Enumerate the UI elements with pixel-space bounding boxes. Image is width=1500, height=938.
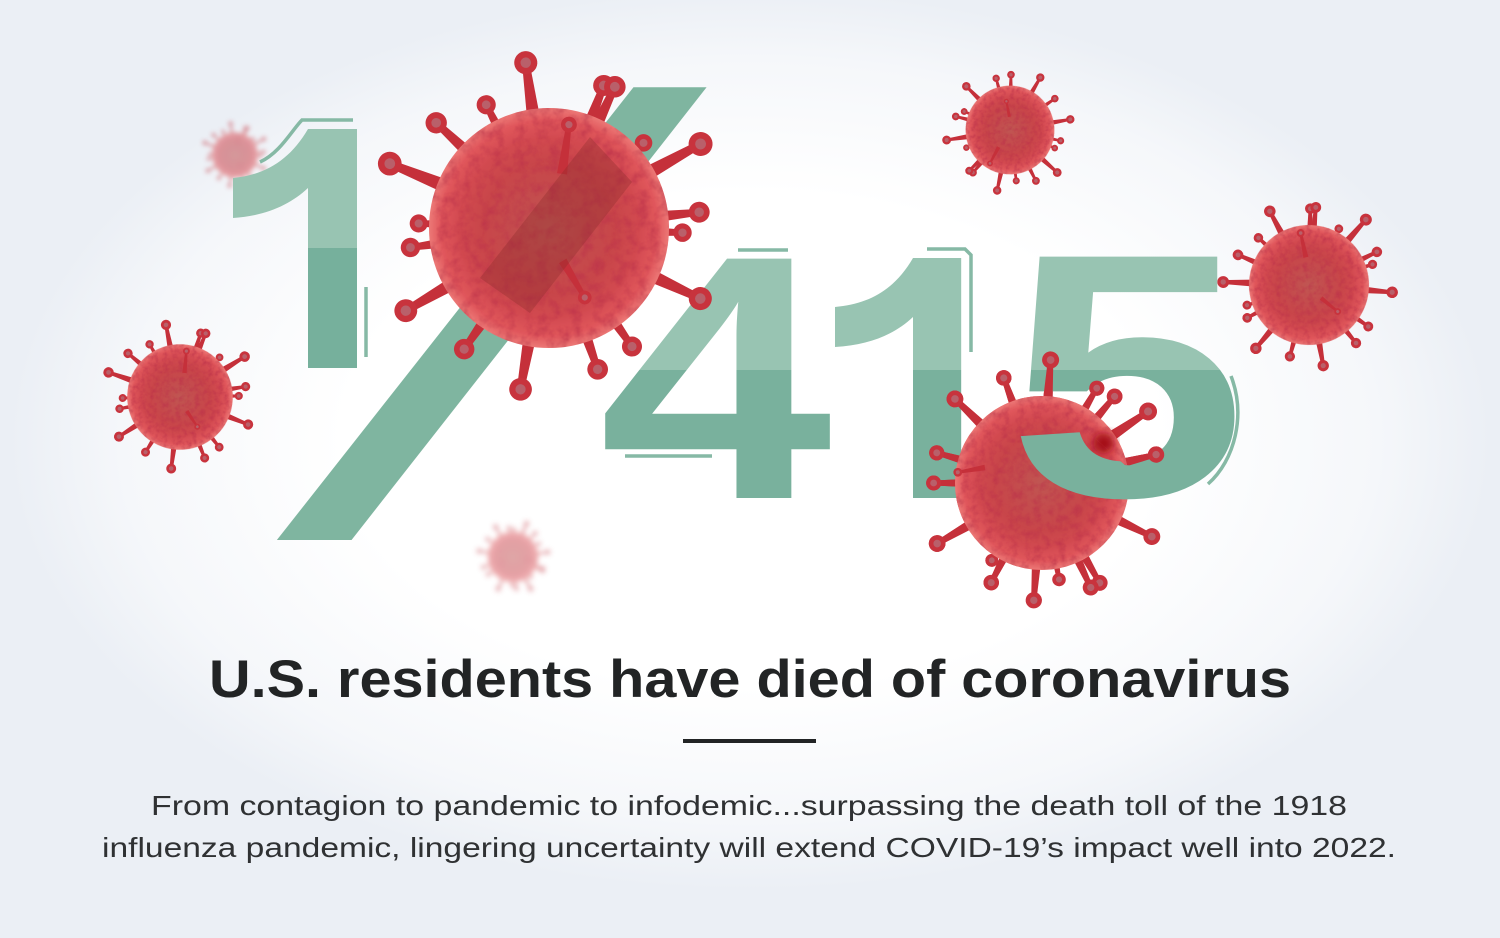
digit 1: [233, 129, 357, 368]
virus lower right: [926, 351, 1166, 609]
slash overlay on large virus: [480, 137, 632, 313]
blurred virus top left: [202, 121, 267, 188]
digit 5: 5: [1008, 181, 1246, 570]
digit 1 second: 1: [817, 107, 1036, 596]
digit 4: 4: [599, 183, 835, 572]
virus top centre right: [929, 48, 1093, 214]
divider: [683, 739, 816, 743]
accent lines: [260, 120, 1238, 484]
description: From contagion to pandemic to infodemic...surpassing the death toll of the 1918: [151, 790, 1347, 821]
description: influenza pandemic, lingering uncertainty will extend COVID-19’s impact well into 2022.: [102, 832, 1396, 863]
blurred virus bottom: [476, 520, 550, 592]
description: [102, 790, 1396, 863]
big number 1/415: [233, 87, 962, 540]
virus lower right, portion in front of digit 5: [926, 351, 1166, 609]
virus right: [1196, 172, 1418, 397]
large virus with slash overlay: [374, 50, 717, 402]
digit 1 second: [835, 258, 962, 498]
title: U.S. residents have died of coronavirus: [209, 650, 1291, 709]
virus far left: [99, 315, 258, 478]
